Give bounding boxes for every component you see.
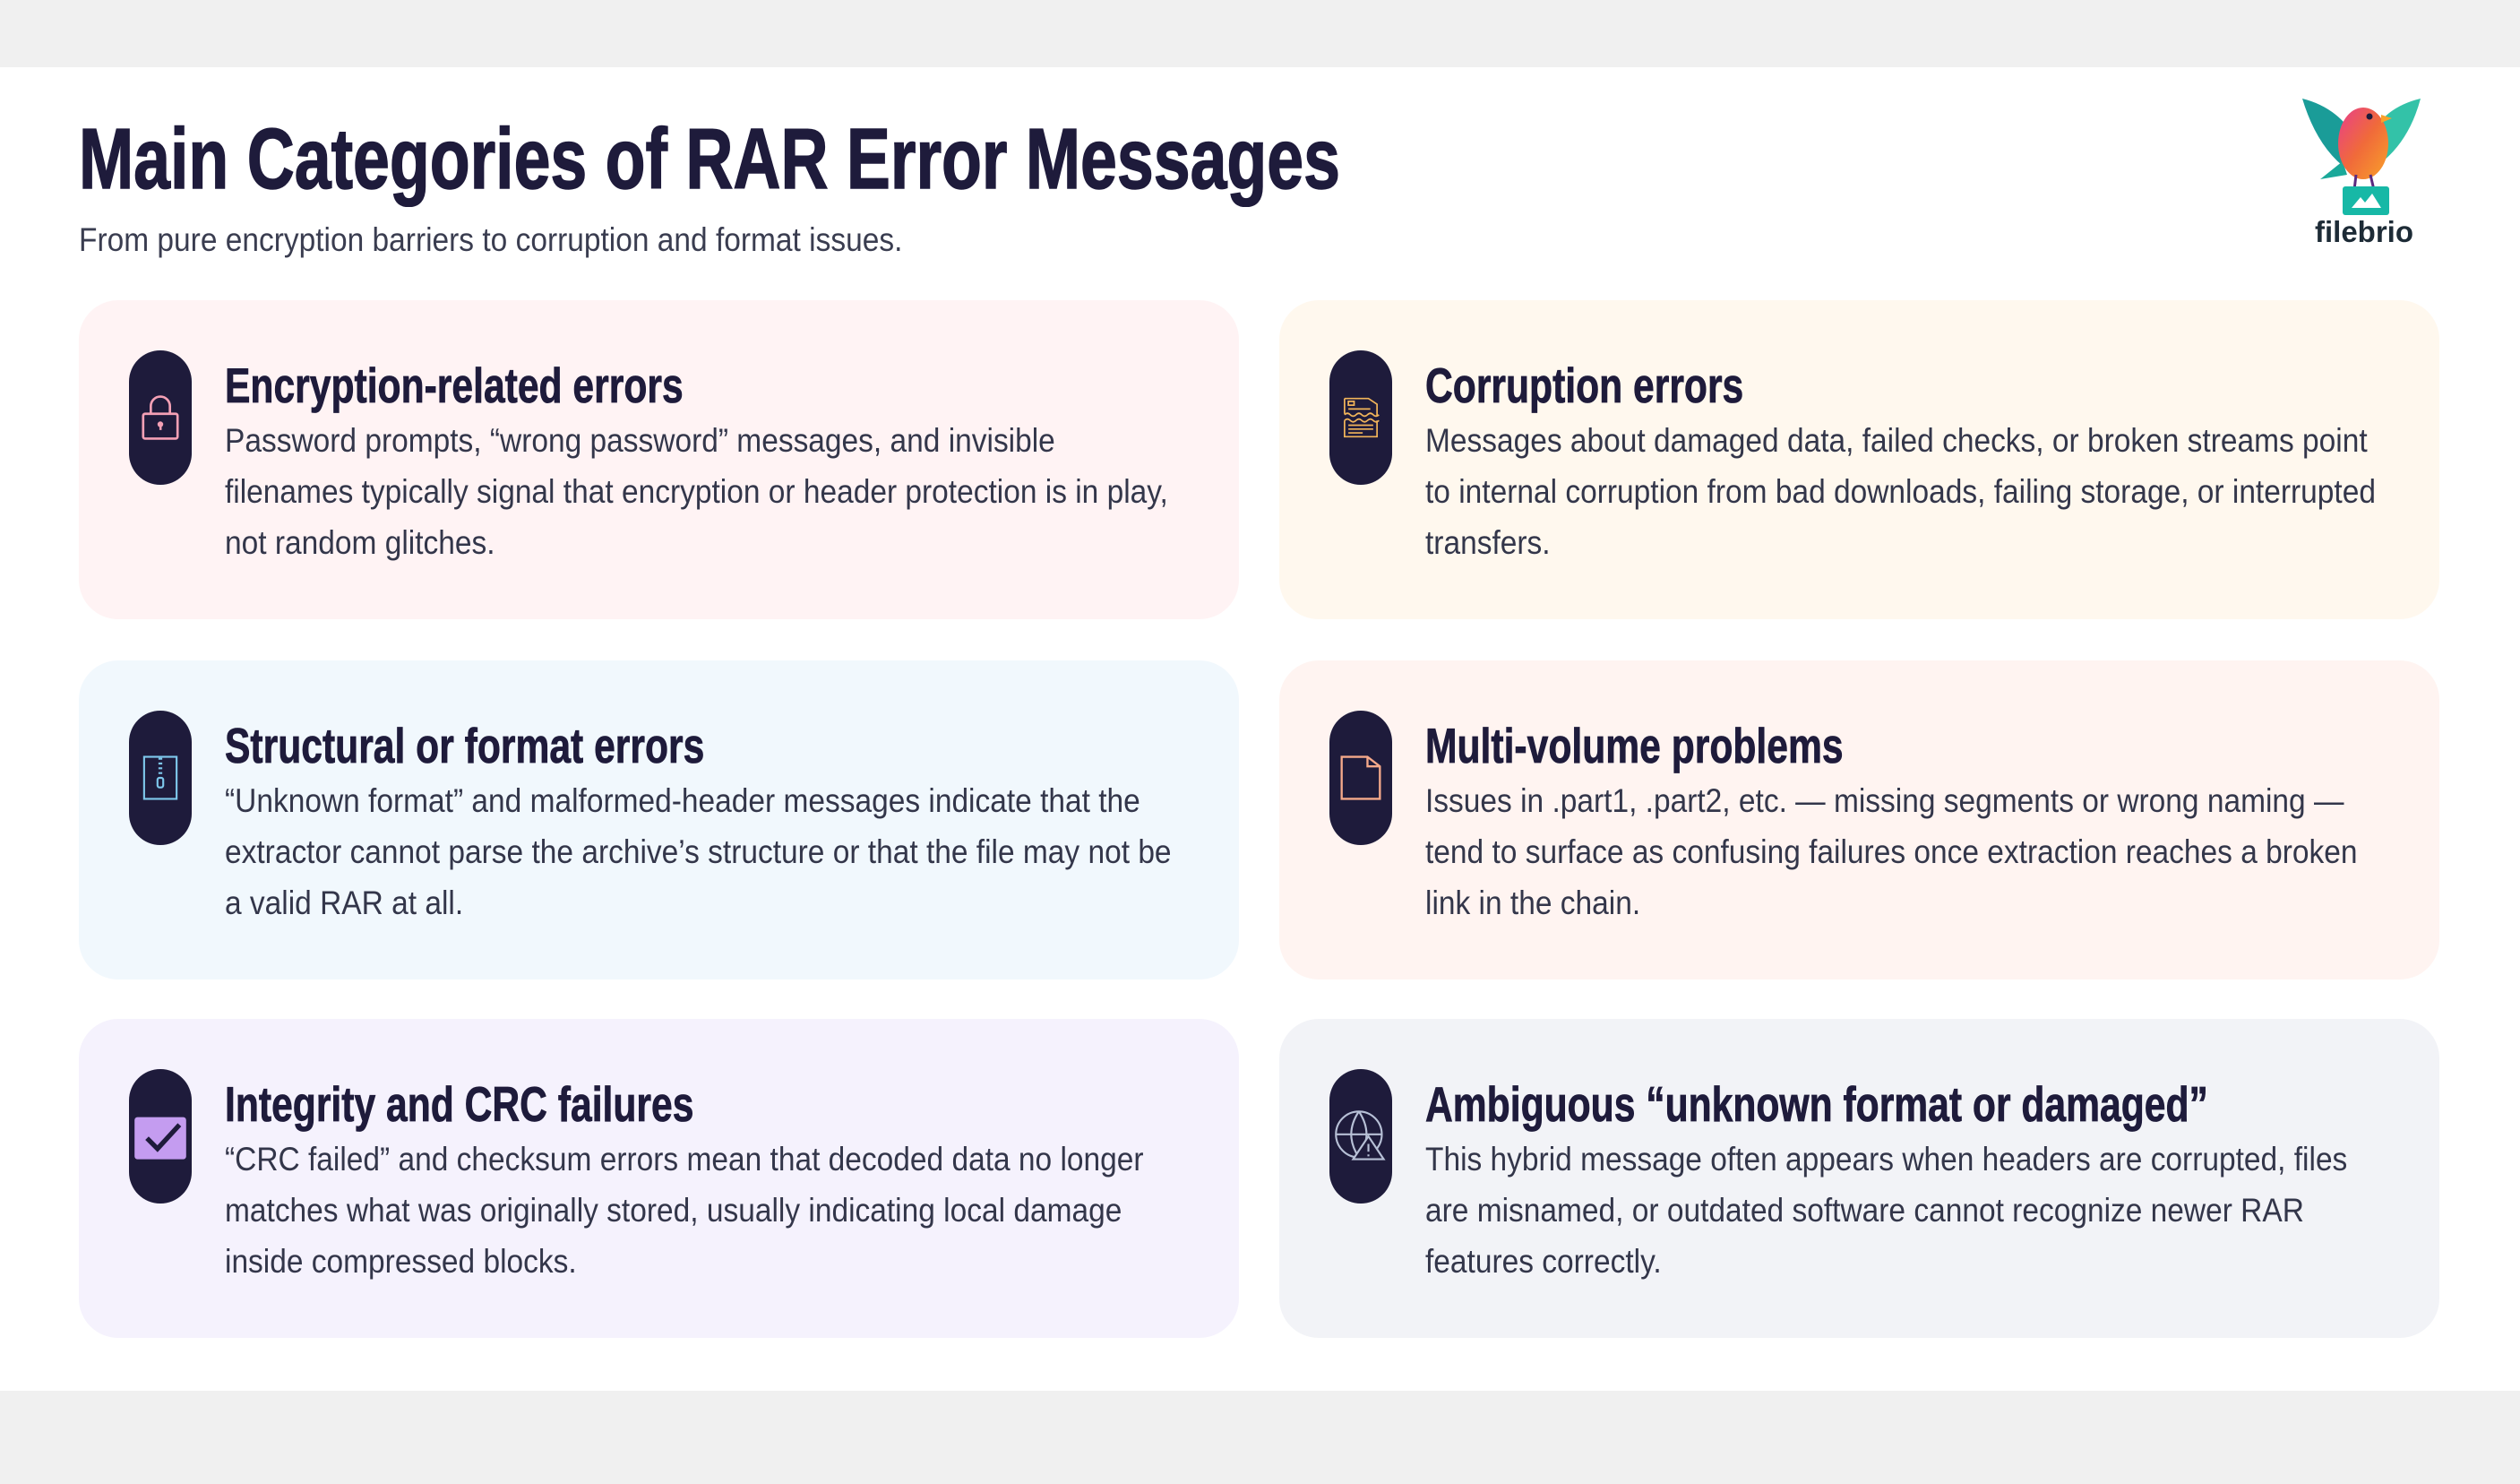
icon: lock <box>129 350 192 485</box>
icon: corrupted document <box>1329 350 1392 485</box>
icon: zip file <box>129 711 192 845</box>
heading: Ambiguous “unknown format or damaged” <box>1425 1076 2208 1132</box>
text: features correctly. <box>1425 1243 1662 1280</box>
text <box>225 422 1168 561</box>
text: a valid RAR at all. <box>225 884 463 921</box>
text <box>1425 782 2358 921</box>
panel: encryption <box>79 300 1239 619</box>
text: “Unknown format” and malformed-header messages indicate that the <box>225 782 1140 819</box>
text: matches what was originally stored, usually indicating local damage <box>225 1192 1122 1229</box>
text <box>1425 1141 2347 1280</box>
text: Messages about damaged data, failed checks, or broken streams point <box>1425 422 2368 459</box>
panel: multi-volume <box>1279 660 2439 979</box>
subtitle: From pure encryption barriers to corruption and format issues. <box>79 221 902 258</box>
logo <box>2302 99 2421 248</box>
logo: filebrio <box>2315 215 2413 248</box>
text <box>225 782 1172 921</box>
panel: ambiguous <box>1279 1019 2439 1338</box>
text: “CRC failed” and checksum errors mean that decoded data no longer <box>225 1141 1144 1178</box>
heading: Encryption-related errors <box>225 358 684 413</box>
title: Main Categories of RAR Error Messages <box>79 111 1340 207</box>
text: extractor cannot parse the archive’s structure or that the file may not be <box>225 833 1172 870</box>
heading: Corruption errors <box>1425 358 1743 413</box>
text: link in the chain. <box>1425 884 1640 921</box>
text: to internal corruption from bad downloads, failing storage, or interrupted <box>1425 473 2376 510</box>
heading: Integrity and CRC failures <box>225 1076 693 1132</box>
text <box>225 1141 1144 1280</box>
text <box>1425 422 2376 561</box>
text: not random glitches. <box>225 524 495 561</box>
text: This hybrid message often appears when headers are corrupted, files <box>1425 1141 2347 1178</box>
panel: structural <box>79 660 1239 979</box>
heading: Structural or format errors <box>225 718 704 773</box>
icon: checkbox <box>129 1069 192 1204</box>
text: tend to surface as confusing failures once extraction reaches a broken <box>1425 833 2358 870</box>
icon: document <box>1329 711 1392 845</box>
panel: integrity <box>79 1019 1239 1338</box>
text: inside compressed blocks. <box>225 1243 577 1280</box>
text: transfers. <box>1425 524 1551 561</box>
text: Issues in .part1, .part2, etc. — missing segments or wrong naming — <box>1425 782 2344 819</box>
text: Password prompts, “wrong password” messages, and invisible <box>225 422 1055 459</box>
text: are misnamed, or outdated software cannot recognize newer RAR <box>1425 1192 2304 1229</box>
text: filenames typically signal that encryption or header protection is in play, <box>225 473 1168 510</box>
icon: globe warning <box>1329 1069 1392 1204</box>
heading: Multi-volume problems <box>1425 718 1844 773</box>
panel: corruption <box>1279 300 2439 619</box>
